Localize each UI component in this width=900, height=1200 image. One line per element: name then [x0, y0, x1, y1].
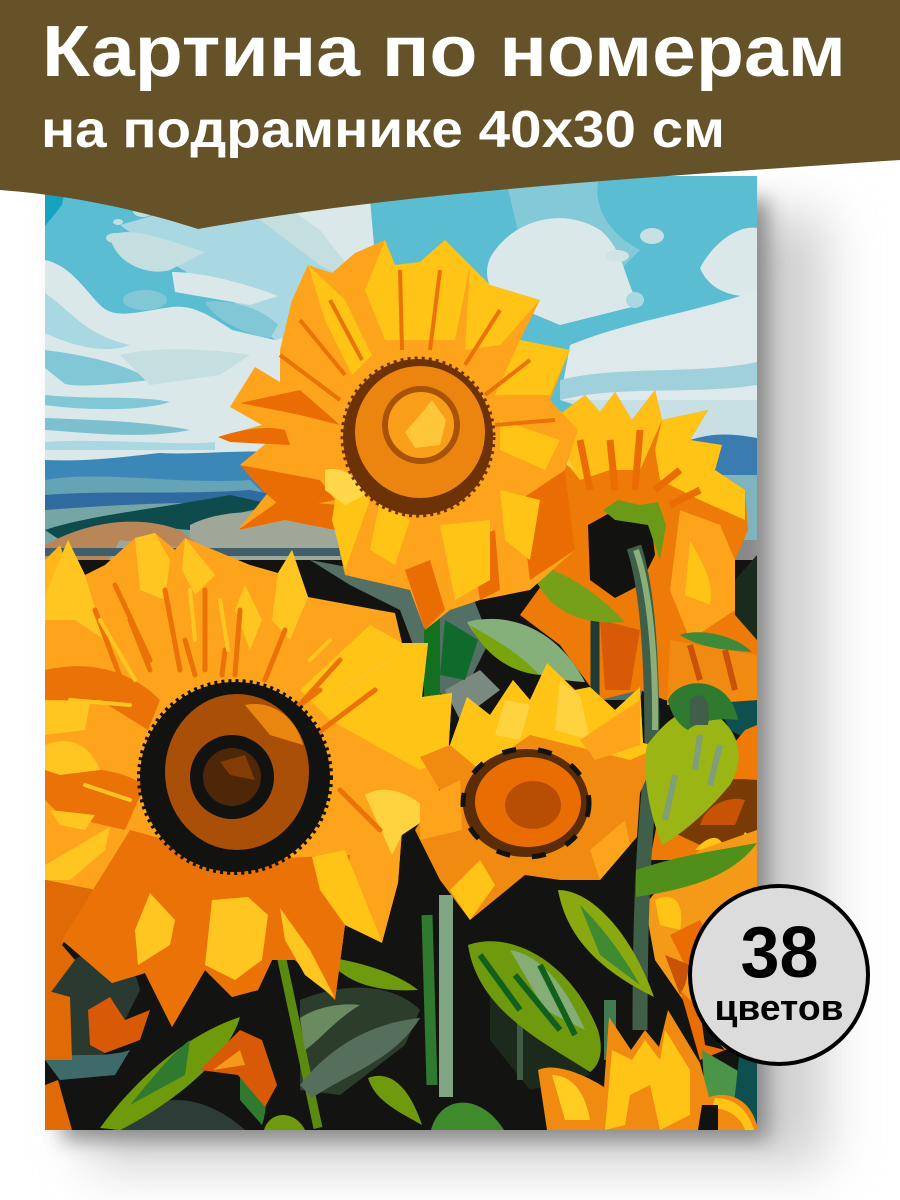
leaf: large muted [467, 619, 585, 682]
badge: 38 colours [690, 886, 868, 1064]
pale yellow patches [325, 469, 365, 505]
title: Картина по номерам [42, 12, 846, 92]
sepals [603, 500, 666, 560]
far right back flower [735, 555, 757, 640]
badge: 38 colours: цветов [714, 987, 844, 1028]
right yellow petals [300, 625, 452, 770]
yellow petal highlights [308, 240, 570, 600]
yellow top petals [450, 663, 660, 770]
banner [0, 0, 900, 229]
flower: big left [45, 533, 452, 1027]
yellow petal tips [562, 390, 757, 705]
left orange petals [45, 666, 160, 830]
flower: right middle partial [651, 725, 757, 860]
clouds [45, 200, 757, 462]
leaves [100, 565, 757, 1130]
flower: back right [510, 390, 757, 705]
painting: sunflowers [45, 176, 757, 1130]
dark foliage [45, 560, 757, 1130]
canvas shadow [62, 200, 825, 1165]
flower: bottom right yellow [538, 1010, 757, 1130]
stems [281, 547, 655, 1128]
leaf: big right [645, 683, 739, 845]
leaf: bottom left [100, 1017, 240, 1130]
leaf: under big flower [339, 959, 418, 990]
sky [45, 176, 757, 412]
subtitle: на подрамнике 40х30 см [41, 101, 725, 159]
top petal tips [45, 533, 308, 650]
badge: 38 colours: 38 [740, 913, 818, 993]
leaf: centre low [558, 890, 654, 997]
leaf: right lower [636, 843, 757, 897]
flower: bottom left fragments [45, 990, 277, 1130]
lower petals [450, 860, 495, 920]
leaf: bottom centre [368, 1076, 422, 1125]
left orange petals [218, 390, 575, 630]
leaf: upper centre [538, 570, 625, 622]
seed disk [140, 682, 330, 872]
lower and left yellow petals [45, 700, 335, 998]
leaf: bottom right [702, 1050, 738, 1098]
petal streaks [280, 270, 555, 425]
leaf: lower large [468, 941, 601, 1072]
flower: small center [415, 663, 660, 920]
flower back: black centre [588, 510, 655, 598]
flower: top center [218, 240, 578, 630]
seed disk [343, 359, 493, 515]
lower orange petals [62, 830, 350, 1027]
leaf: back right small [680, 632, 752, 652]
petal streaks [95, 585, 380, 830]
leaf: dark grey green [300, 1018, 420, 1098]
flower: lower right [645, 830, 757, 1060]
flower: left partial [45, 545, 94, 992]
seed disk [463, 749, 589, 857]
mountains and fields [45, 434, 757, 560]
